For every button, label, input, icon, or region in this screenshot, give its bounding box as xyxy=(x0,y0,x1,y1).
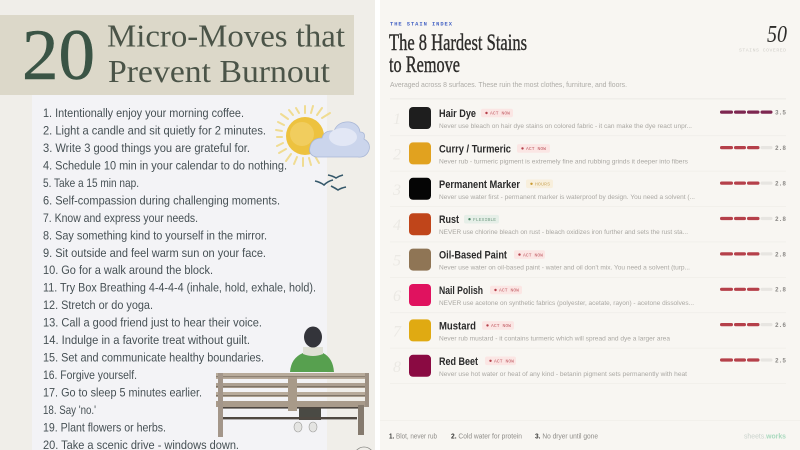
panel: list of twenty moves: 6. Self-compassion during challenging moments. xyxy=(43,193,280,207)
row 2: curry / turmeric: 2 xyxy=(393,146,401,163)
row 7: mustard: 7 xyxy=(393,323,402,340)
heading band: Micro-Moves that xyxy=(107,18,345,54)
panel: list of twenty moves: 1. Intentionally enjoy your morning coffee. xyxy=(43,106,244,120)
row 5: oil-based paint xyxy=(393,249,786,272)
footer tips xyxy=(389,434,598,440)
panel: list of twenty moves: 5. Take a 15 min nap. xyxy=(43,176,139,190)
footer brand: sheets.works xyxy=(744,432,786,440)
row 5: oil-based paint: 2.8 xyxy=(775,251,786,258)
title xyxy=(389,30,527,77)
row 3: permanent marker: HOURS xyxy=(535,182,550,188)
row 1: hair dye: 3.5 xyxy=(775,110,786,116)
panel: list of twenty moves: 16. Forgive yourself. xyxy=(43,368,137,382)
stat: stains covered xyxy=(739,22,787,54)
panel: list of twenty moves: 19. Plant flowers or herbs. xyxy=(43,420,166,434)
icon: corner badge xyxy=(354,447,374,450)
footer tips: 2. Cold water for protein xyxy=(451,434,522,440)
stat: stains covered: STAINS COVERED xyxy=(739,48,786,54)
heading band: Prevent Burnout xyxy=(108,53,330,89)
title: to Remove xyxy=(389,52,460,77)
row 8: red beet: 8 xyxy=(393,359,401,376)
panel: list of twenty moves: 4. Schedule 10 min in your calendar to do nothing. xyxy=(43,158,287,172)
row 5: oil-based paint: ACT NOW xyxy=(523,252,543,258)
row 1: hair dye: Never use bleach on hair dye stains on colored fabric - it can make the dye react unpr... xyxy=(439,123,692,130)
row 4: rust: 2.8 xyxy=(775,216,786,223)
row 4: rust: Rust xyxy=(439,214,459,226)
icon: birds xyxy=(315,175,346,190)
row 7: mustard: ACT NOW xyxy=(491,323,511,329)
row 2: curry / turmeric: Never rub - turmeric pigment is extremely fine and rubbing grinds it deeper into fibers xyxy=(439,158,689,165)
row 2: curry / turmeric: Curry / Turmeric xyxy=(439,143,511,155)
row 4: rust: FLEXIBLE xyxy=(473,217,496,223)
row 3: permanent marker: 3 xyxy=(392,182,401,199)
row 8: red beet xyxy=(393,355,786,378)
row 7: mustard: Mustard xyxy=(439,320,476,332)
title: The 8 Hardest Stains xyxy=(389,30,527,55)
row 8: red beet: Red Beet xyxy=(439,356,478,368)
panel: list of twenty moves: 15. Set and communicate healthy boundaries. xyxy=(43,351,264,365)
eyebrow label: THE STAIN INDEX xyxy=(390,22,453,28)
row 2: curry / turmeric: ACT NOW xyxy=(526,146,546,152)
panel: list of twenty moves: 11. Try Box Breathing 4-4-4-4 (inhale, hold, exhale, hold). xyxy=(43,281,316,295)
footer tips: 3. No dryer until gone xyxy=(535,434,598,440)
bench xyxy=(216,373,369,437)
row 7: mustard xyxy=(393,319,786,342)
row 6: nail polish: 6 xyxy=(393,288,401,305)
panel: list of twenty moves xyxy=(32,95,327,450)
row 1: hair dye: 1 xyxy=(393,111,401,128)
row 6: nail polish: 2.8 xyxy=(775,287,786,294)
row 4: rust xyxy=(393,213,786,236)
row 3: permanent marker xyxy=(392,178,786,201)
panel: list of twenty moves: 14. Indulge in a favorite treat without guilt. xyxy=(43,333,250,347)
row 8: red beet: ACT NOW xyxy=(494,358,514,364)
row 5: oil-based paint: Oil-Based Paint xyxy=(439,250,507,262)
icon: cloud xyxy=(310,122,369,157)
row 4: rust: 4 xyxy=(393,217,401,234)
icon: sun xyxy=(276,106,330,166)
row 7: mustard: 2.6 xyxy=(775,322,786,329)
row 2: curry / turmeric xyxy=(393,142,786,165)
row 2: curry / turmeric: 2.8 xyxy=(775,145,786,152)
footer tips: 1. Blot, never rub xyxy=(389,434,437,440)
row 6: nail polish: Nail Polish xyxy=(439,285,483,297)
row 5: oil-based paint: Never use water on oil-based paint - water and oil don't mix. You need a solvent (turp... xyxy=(439,265,690,272)
panel: list of twenty moves: 17. Go to sleep 5 minutes earlier. xyxy=(43,386,202,400)
panel: list of twenty moves: 12. Stretch or do yoga. xyxy=(43,298,153,312)
row 1: hair dye: ACT NOW xyxy=(490,111,510,117)
panel: stain index xyxy=(380,0,800,450)
row 5: oil-based paint: 5 xyxy=(393,253,401,270)
row 1: hair dye xyxy=(393,107,786,130)
row 7: mustard: Never rub mustard - it contains turmeric which will spread and dye a larger area xyxy=(439,335,670,342)
panel: micro-moves poster xyxy=(0,0,375,450)
stat: stains covered: 50 xyxy=(767,22,787,48)
heading band: 20 xyxy=(22,15,95,95)
panel: list of twenty moves: 13. Call a good friend just to hear their voice. xyxy=(43,316,262,330)
person xyxy=(290,326,334,432)
panel: list of twenty moves: 8. Say something kind to yourself in the mirror. xyxy=(43,228,267,242)
panel: list of twenty moves: 2. Light a candle and sit quietly for 2 minutes. xyxy=(43,124,266,138)
row 3: permanent marker: 2.8 xyxy=(775,180,786,188)
row 8: red beet: 2.5 xyxy=(775,357,786,364)
panel: list of twenty moves: 7. Know and express your needs. xyxy=(43,211,198,225)
row 8: red beet: Never use hot water or heat of any kind - betanin pigment sets permanently with heat xyxy=(439,371,687,378)
panel: list of twenty moves: 9. Sit outside and feel warm sun on your face. xyxy=(43,246,266,260)
row 3: permanent marker: Never use water first - permanent marker is waterproof by design. You need a solvent (... xyxy=(439,194,695,201)
row 1: hair dye: Hair Dye xyxy=(439,108,476,120)
subtitle: Averaged across 8 surfaces. These ruin the most clothes, furniture, and floors. xyxy=(390,80,627,89)
heading band xyxy=(0,15,354,95)
panel: list of twenty moves: 10. Go for a walk around the block. xyxy=(43,263,213,277)
illustration: person on bench xyxy=(216,326,369,437)
panel: list of twenty moves: 3. Write 3 good things you are grateful for. xyxy=(43,141,250,155)
row 4: rust: NEVER use chlorine bleach on rust - bleach oxidizes iron further and sets the rust sta... xyxy=(439,229,688,236)
row 3: permanent marker: Permanent Marker xyxy=(439,179,520,191)
row 6: nail polish xyxy=(393,284,786,307)
row 6: nail polish: ACT NOW xyxy=(499,288,519,294)
panel: list of twenty moves: 18. Say 'no.' xyxy=(43,403,96,417)
row 6: nail polish: NEVER use acetone on synthetic fabrics (polyester, acetate, rayon) - acetone dissolves... xyxy=(439,300,694,307)
